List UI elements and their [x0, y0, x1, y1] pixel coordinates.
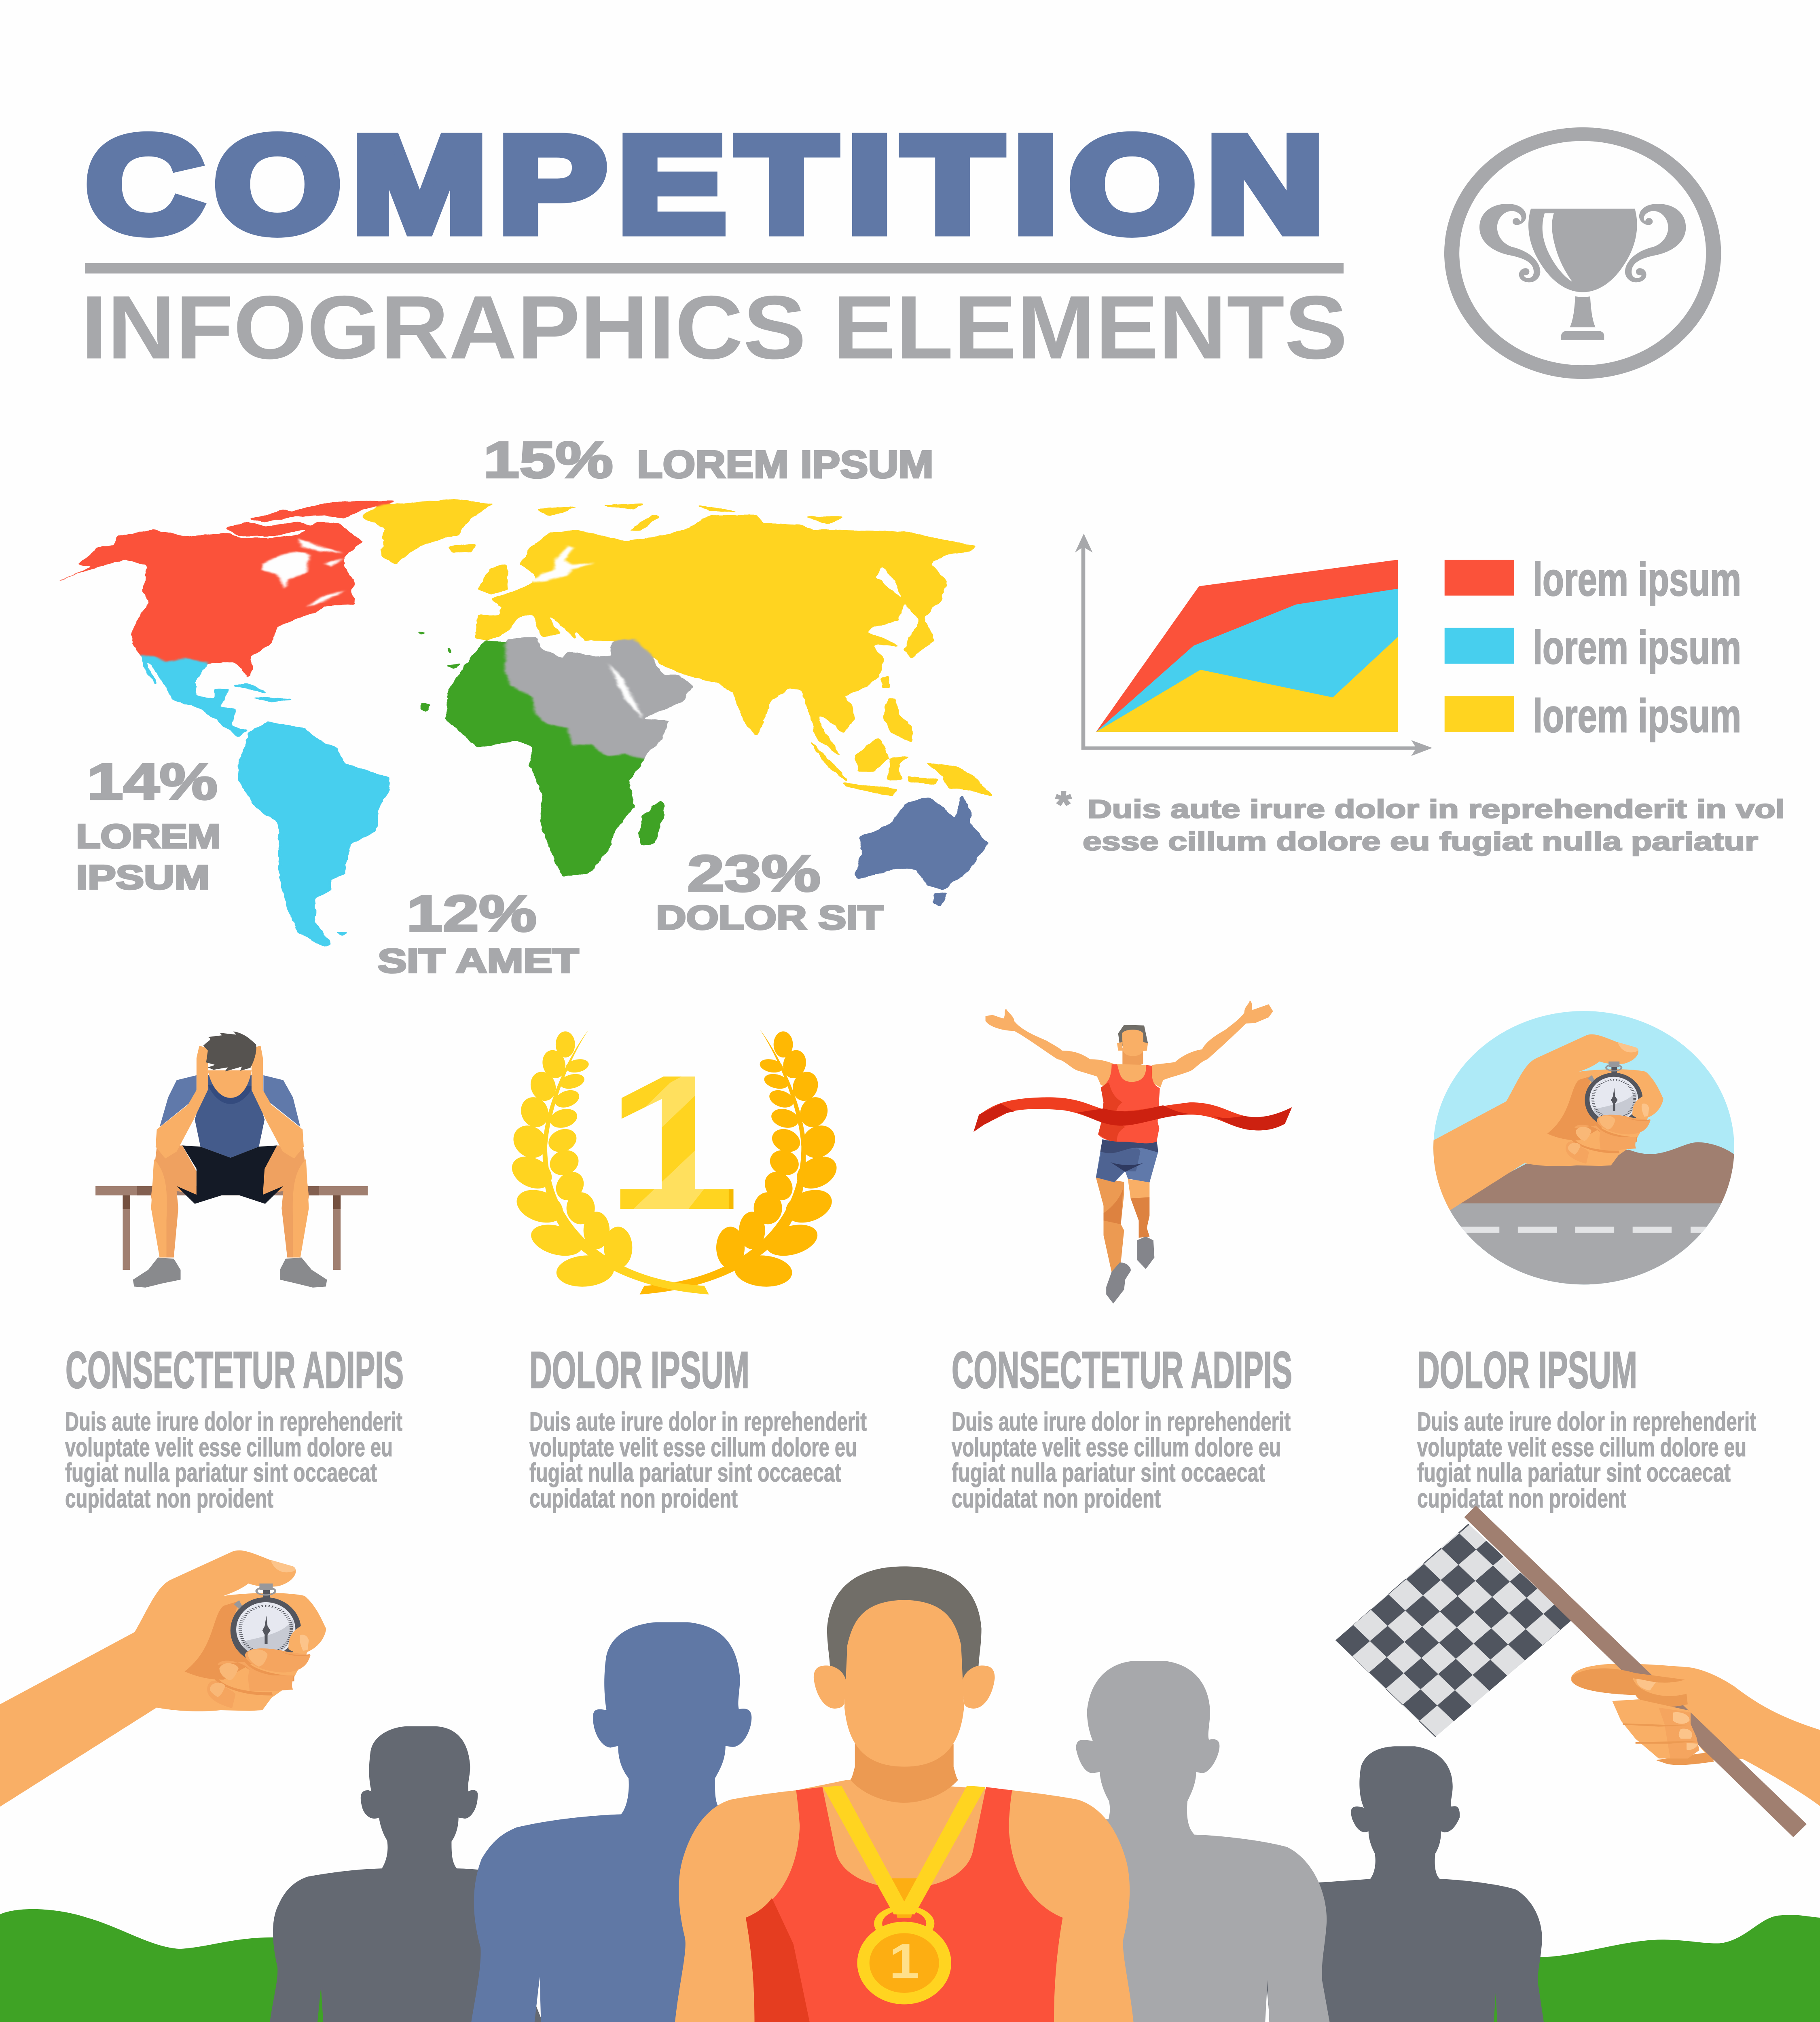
body: cupidatat non proident: [529, 1484, 738, 1513]
map: North Africa and Arabia (grey): [505, 637, 693, 758]
icon: stopwatch in hand over road scene: [1433, 1011, 1734, 1284]
heading: DOLOR IPSUM: [529, 1341, 749, 1399]
heading: CONSECTETUR ADIPIS: [66, 1341, 404, 1399]
icon: defeated athlete on bench: [95, 1031, 368, 1288]
runner shoes: [1106, 1237, 1154, 1303]
map: Africa (green): [418, 632, 665, 876]
text column 4: [1417, 1341, 1756, 1513]
body: voluptate velit esse cillum dolore eu: [952, 1433, 1281, 1462]
runner legs: [1096, 1178, 1149, 1272]
icon: hand with stopwatch, bottom left: [0, 1550, 326, 1807]
body: fugiat nulla pariatur sint occaecat: [952, 1459, 1265, 1487]
chart footnote: Duis aute irure dolor in reprehenderit in vol: [1088, 795, 1785, 824]
label: 15% lorem ipsum: [483, 431, 933, 489]
thumb: [1572, 1668, 1688, 1707]
body: Duis aute irure dolor in reprehenderit: [529, 1407, 867, 1436]
runner head: [1117, 1025, 1148, 1067]
body: Duis aute irure dolor in reprehenderit: [65, 1407, 402, 1436]
map: North America (red): [59, 501, 395, 677]
runner arms: [986, 1000, 1273, 1087]
body: voluptate velit esse cillum dolore eu: [529, 1433, 857, 1462]
world map: [59, 499, 991, 946]
body: [65, 1407, 402, 1513]
chart footnote: *: [1056, 784, 1072, 825]
chart footnote: [1056, 784, 1785, 856]
subtitle: INFOGRAPHICS ELEMENTS: INFOGRAPHICS ELEMENTS: [81, 277, 1348, 378]
shorts: [177, 1145, 283, 1204]
silhouette: dark runner left: [270, 1726, 543, 2022]
silhouette: grey runner: [1049, 1661, 1330, 2022]
label: 23% dolor sit: DOLOR SIT: [656, 898, 883, 936]
runner shorts: [1096, 1139, 1158, 1182]
heading: DOLOR IPSUM: [1417, 1341, 1637, 1399]
bench: [95, 1186, 368, 1270]
body: fugiat nulla pariatur sint occaecat: [65, 1459, 377, 1487]
text column 1: [65, 1341, 404, 1513]
label: 12% sit amet: [378, 885, 579, 980]
title: COMPETITION: COMPETITION: [86, 108, 1335, 261]
medalist hair: [827, 1566, 982, 1681]
arms and head: [156, 1046, 304, 1159]
silhouette: dark runner right: [1258, 1746, 1544, 2022]
map labels: [76, 431, 933, 980]
map: Baltic cut-out: [532, 546, 595, 582]
text column 2: [529, 1341, 867, 1513]
label: 12% sit amet: SIT AMET: [378, 941, 579, 980]
icon: runner crossing the finish line: [973, 1000, 1292, 1303]
area chart: [1075, 534, 1741, 756]
legs: [151, 1145, 309, 1258]
medal: [823, 1786, 986, 2004]
green hills: [0, 1909, 1820, 2022]
medalist tank top: [746, 1787, 1062, 2022]
label: 15% lorem ipsum: LOREM IPSUM: [637, 443, 933, 486]
heading: CONSECTETUR ADIPIS: [952, 1341, 1292, 1399]
label: 14% lorem ipsum: IPSUM: [76, 858, 210, 896]
medalist head: [814, 1600, 995, 1767]
label: 12% sit amet: 12%: [406, 885, 537, 942]
medal number: 1: [889, 1933, 920, 1989]
map: Greenland and Eurasia (yellow): [363, 499, 991, 796]
label: 14% lorem ipsum: 14%: [87, 753, 218, 810]
flag pole: [1464, 1506, 1807, 1837]
legend labels: [1533, 553, 1741, 742]
shirt: [160, 1075, 301, 1158]
label: 15% lorem ipsum: 15%: [483, 431, 613, 489]
body: fugiat nulla pariatur sint occaecat: [529, 1459, 841, 1487]
body: voluptate velit esse cillum dolore eu: [65, 1433, 393, 1462]
label: 14% lorem ipsum: [76, 753, 221, 896]
chart footnote: esse cillum dolore eu fugiat nulla pariatur: [1083, 827, 1758, 856]
body: cupidatat non proident: [65, 1484, 273, 1513]
shoes: [133, 1258, 327, 1288]
body: cupidatat non proident: [952, 1484, 1161, 1513]
hair: [203, 1031, 256, 1072]
map: Central America and South America (blue): [142, 656, 389, 946]
gold medalist: [675, 1566, 1134, 2022]
fingers: [1612, 1699, 1699, 1758]
body: [952, 1407, 1291, 1513]
wreath right branch: [640, 1030, 843, 1294]
body: [529, 1407, 867, 1513]
scene: sky, hill and road: [1433, 1011, 1734, 1284]
chart axes and areas: [1075, 534, 1514, 756]
hand holding stopwatch: [1433, 1034, 1663, 1210]
number one: 1: [605, 1034, 740, 1250]
medalist shoulders and chest: [675, 1780, 1134, 2022]
label: 14% lorem ipsum: LOREM: [76, 817, 221, 855]
label: 23% dolor sit: 23%: [687, 845, 821, 902]
title underline: [85, 263, 1344, 273]
hand arm: [1571, 1664, 1820, 1806]
map: Australia (dark blue): [856, 796, 987, 906]
finish ribbon: [973, 1097, 1292, 1132]
silhouette: blue runner: [471, 1622, 760, 2022]
title block: [81, 108, 1348, 378]
checkered flag: [1335, 1524, 1572, 1737]
body: cupidatat non proident: [1417, 1484, 1626, 1513]
body: Duis aute irure dolor in reprehenderit: [952, 1407, 1291, 1436]
wreath left branch: [506, 1030, 709, 1294]
icon: trophy in circle: [1452, 134, 1714, 372]
icon: laurel wreath with number one: [506, 1030, 843, 1294]
medalist neck: [850, 1744, 958, 1803]
runner tank top: [1098, 1064, 1160, 1143]
text column 3: [952, 1341, 1292, 1513]
map: Hudson Bay and Gulf of St Lawrence cut-outs: [263, 538, 345, 607]
icon: hand with checkered flag: [1335, 1506, 1820, 1837]
label: 23% dolor sit: [656, 845, 883, 936]
body: [1417, 1407, 1756, 1513]
